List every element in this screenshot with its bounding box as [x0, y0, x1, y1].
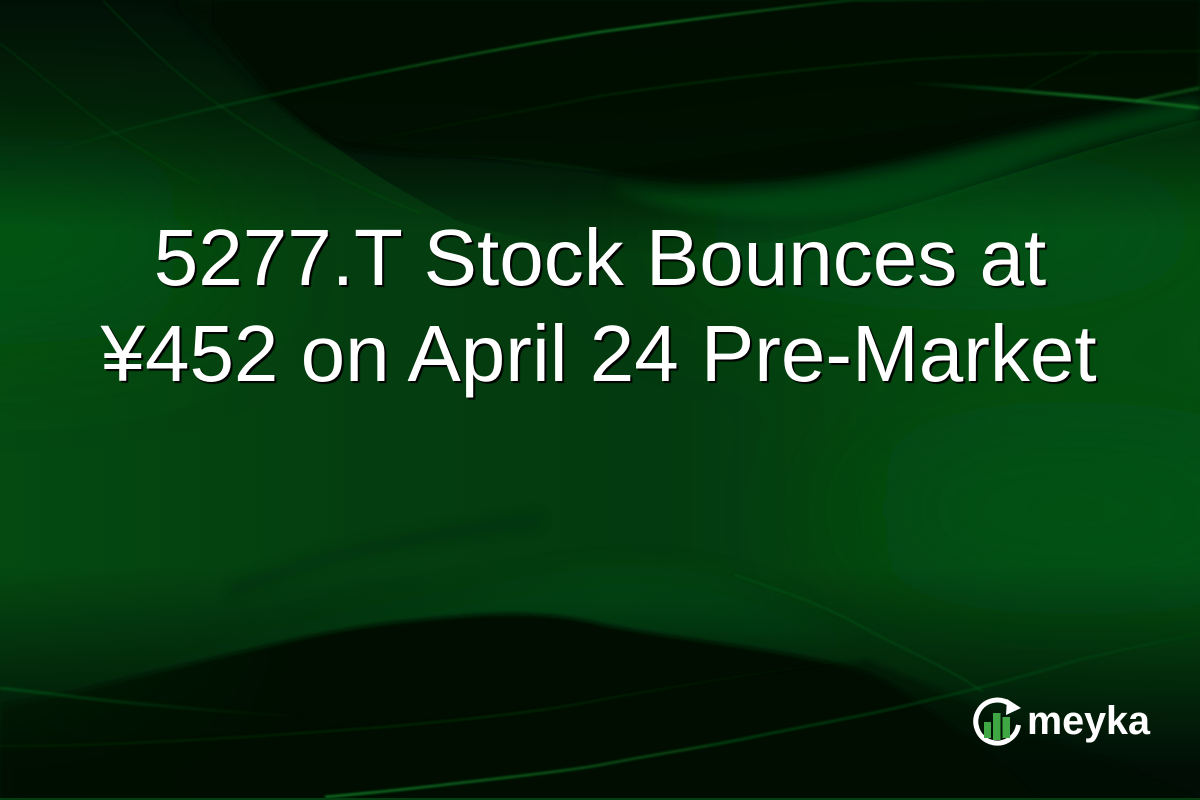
band above hump: [70, 575, 850, 700]
bottom fade: [0, 565, 1200, 800]
icon: circular arrow: [976, 699, 1021, 743]
dark wedge above streak: [170, 0, 853, 96]
dark band below the thin bottom line: [0, 660, 1200, 800]
title: [100, 213, 1098, 400]
title: ¥452 on April 24 Pre-Market: [100, 309, 1097, 398]
shading below the top lens: [268, 87, 1200, 253]
bottom dark hump: [0, 614, 1040, 800]
logo icon: ring with arrow and green bars: [973, 698, 1021, 746]
logo wordmark: meyka: [1027, 699, 1150, 743]
dark wisp above hump: [230, 520, 540, 592]
bright band beneath lens: [610, 98, 1200, 218]
title: 5277.T Stock Bounces at: [154, 213, 1046, 302]
main dark lens, top: [215, 0, 1200, 182]
large soft colour blobs: [0, 180, 1200, 570]
icon: bar chart: [984, 713, 1010, 740]
top fade: [0, 0, 1200, 230]
